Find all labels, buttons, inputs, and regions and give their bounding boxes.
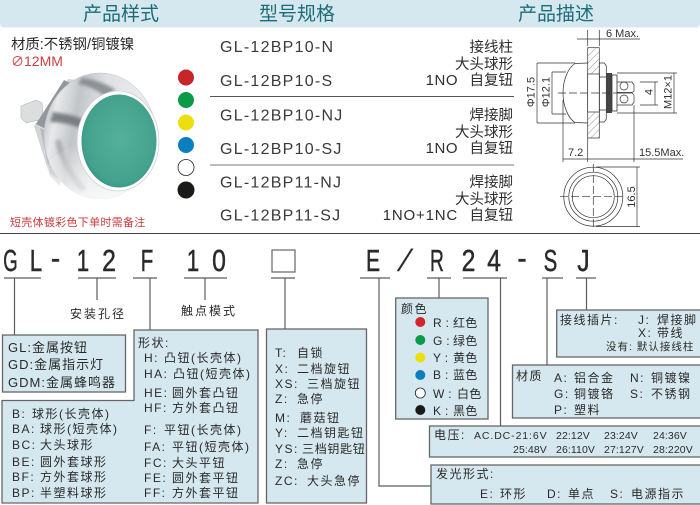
panel: voltage: AC.DC-21:6V: [474, 430, 548, 442]
panel: colour: 颜色: [401, 301, 428, 316]
part-number code: /: [394, 243, 416, 278]
label: contact mode: 触点模式: [181, 304, 237, 318]
panel: shape: 圆外套平钮: [172, 470, 240, 485]
part-number code: S: [544, 243, 557, 278]
diameter text: ∅12MM: [11, 53, 63, 69]
panel: switch function: 自锁: [297, 345, 324, 360]
panel: shape: FA:: [144, 440, 167, 454]
part-number code: -: [51, 241, 60, 276]
panel: lighting form: 单点: [568, 487, 595, 501]
panel: terminal: 没有: 默认接线柱: [606, 340, 694, 353]
description text: 1NO: [426, 140, 458, 157]
panel: shape: BA:: [12, 422, 36, 436]
model numbers: GL-12BP10-NJ: [220, 108, 344, 124]
panel: lighting form: D:: [547, 487, 562, 501]
panel: colour: 红色: [453, 315, 478, 330]
panel: shape: 圆外套球形: [40, 455, 108, 469]
panel: shape: F:: [144, 423, 158, 437]
panel: lighting form: 电源指示: [631, 486, 685, 501]
panel: shape: BF:: [12, 470, 35, 484]
panel: switch function: 蘑菇钮: [300, 410, 341, 425]
panel: shape: 大头球形: [40, 438, 94, 452]
panel: terminal: 焊接脚: [657, 312, 698, 327]
panel: switch function: M:: [275, 411, 291, 425]
panel: shape: 半塑料球形: [40, 485, 108, 500]
panel: lighting form: E:: [480, 487, 494, 501]
description text: 焊接脚: [470, 107, 513, 124]
model numbers: GL-12BP11-NJ: [220, 174, 342, 192]
description text: 大头球形: [455, 56, 513, 73]
panel: lighting form: 环形: [500, 487, 527, 501]
panel: shape: [2, 330, 258, 503]
panel: shape: 平钮(长壳体): [164, 422, 242, 437]
technical drawing: side view: Φ17.5: [526, 77, 538, 107]
panel: shape: FF:: [144, 486, 166, 500]
panel: material: P:: [554, 403, 568, 417]
panel: shape: HF:: [144, 401, 168, 415]
panel: terminal: 带线: [657, 326, 684, 340]
underlines and connectors: [4, 278, 596, 486]
part-number code: [3, 241, 590, 278]
heading: product style: 产品样式: [83, 3, 159, 25]
panel: lighting form: S:: [610, 487, 624, 501]
panel: shape: BP:: [12, 486, 36, 500]
panel: colour: G :: [433, 334, 450, 348]
panel: material: [512, 365, 700, 418]
model numbers: [220, 39, 344, 224]
panel: shape: BE:: [12, 455, 36, 469]
panel: shape: 方外套凸钮: [172, 400, 240, 415]
technical drawing: side view: [526, 28, 684, 162]
panel: colour: K :: [433, 404, 449, 418]
panel: colour: Y :: [433, 351, 448, 365]
panel: shape: 凸钮(长壳体): [164, 350, 242, 365]
panel: colour: R :: [433, 316, 449, 330]
panel: voltage: 28:220V: [653, 444, 693, 456]
panel: shape: B:: [12, 407, 26, 421]
technical drawing: side view: 15.5Max.: [639, 147, 684, 159]
heading: model spec: 型号规格: [259, 3, 335, 25]
model numbers: GL-12BP11-SJ: [220, 208, 341, 224]
panel: material: 铜镀铬: [574, 386, 615, 401]
panel: material: 不锈钢: [651, 387, 692, 401]
panel: shape: H:: [144, 351, 159, 365]
panel: material: 材质: [516, 369, 543, 383]
panel: switch function: [266, 329, 366, 503]
model numbers: GL-12BP10-N: [220, 39, 334, 56]
panel: colour: 黄色: [453, 351, 478, 365]
panel: switch function: Z:: [275, 457, 289, 471]
panel: shape: FC:: [144, 456, 168, 470]
panel: material: G:: [554, 387, 570, 401]
part-number code: 1: [77, 243, 89, 278]
panel: terminal: J:: [638, 313, 650, 327]
part-number code: 4: [487, 243, 501, 278]
panel: material: 铝合金: [574, 370, 615, 385]
panel: switch function: 二档钥匙钮: [297, 425, 365, 440]
panel: switch function: Y:: [275, 426, 289, 440]
panel: shape: HE:: [144, 386, 169, 400]
description text: 1NO: [426, 72, 458, 89]
part-number code: L: [30, 243, 42, 278]
panel: series: GD:金属指示灯: [8, 357, 104, 372]
panel: colour: 蓝色: [453, 368, 478, 382]
technical drawing: side view: Φ12.1: [540, 77, 552, 107]
panel: shape: BC:: [12, 438, 37, 452]
colour dots: [178, 70, 194, 198]
part-number code: E: [366, 243, 380, 278]
part-number code: 0: [212, 243, 226, 278]
panel: shape: 平钮(短壳体): [172, 439, 250, 454]
panel: switch function: Z:: [275, 392, 289, 406]
panel: voltage: 电压:: [434, 428, 466, 442]
technical drawing: front view: 16.5: [626, 186, 638, 208]
header band: [0, 0, 700, 28]
panel: shape: 方外套平钮: [172, 485, 240, 500]
panel: switch function: 急停: [297, 391, 324, 406]
description text: 自复钮: [470, 71, 513, 89]
panel: switch function: YS:: [275, 442, 299, 456]
panel: switch function: 三档钥匙钮: [302, 441, 366, 456]
part-number code: G: [3, 244, 18, 278]
description text: 自复钮: [470, 206, 513, 224]
part-number code: 1: [187, 243, 199, 278]
panel: voltage: 27:127V: [604, 444, 644, 456]
part-number code: 2: [102, 243, 116, 278]
panel: terminal: X:: [638, 326, 652, 340]
panel: colour: 白色: [457, 386, 482, 401]
panel: shape: 凸钮(短壳体): [173, 366, 252, 381]
heading: product description: 产品描述: [518, 3, 594, 25]
panel: material: 塑料: [574, 402, 601, 417]
panel: switch function: X:: [275, 362, 289, 376]
panel: series: GDM:金属蜂鸣器: [8, 375, 116, 390]
panel: shape: FE:: [144, 471, 167, 485]
panel: switch function: XS:: [275, 377, 299, 391]
panel: material: 铜镀镍: [651, 370, 692, 385]
technical drawing: side view: 6 Max.: [606, 28, 639, 40]
part-number code: -: [517, 241, 527, 276]
panel: colour: 绿色: [453, 333, 478, 348]
part-number code: J: [577, 243, 590, 278]
panel: series: [2, 335, 126, 392]
panel: shape: 球形(短壳体): [40, 422, 118, 436]
panel: colour: 黑色: [453, 404, 478, 418]
panel: shape: 形状:: [138, 336, 170, 350]
panel: colour: B :: [433, 368, 449, 382]
description text: 自复钮: [470, 139, 513, 157]
part-number code: R: [430, 245, 444, 278]
material text: 材质:不锈钢/铜镀镍: [11, 36, 134, 53]
panel: material: S:: [630, 387, 644, 401]
panel: shape: HA:: [144, 367, 169, 381]
panel: colour: W :: [433, 387, 452, 401]
panel: switch function: ZC:: [275, 474, 299, 488]
panel: series: GL:金属按钮: [8, 340, 88, 355]
panel: voltage: 26:110V: [556, 444, 595, 456]
panel: voltage: 24:36V: [653, 430, 687, 442]
panel: terminal: 接线插片:: [560, 312, 619, 327]
panel: shape: 圆外套凸钮: [172, 385, 240, 400]
panel: shape: 方外套球形: [40, 469, 108, 484]
description text: 1NO+1NC: [383, 207, 458, 224]
part-number code: F: [141, 243, 153, 278]
panel: voltage: 22:12V: [556, 430, 590, 442]
panel: material: A:: [554, 371, 568, 385]
footnote: 短壳体镀彩色下单时需备注: [10, 215, 146, 229]
description text: [383, 39, 513, 224]
panel: switch function: 二档旋钮: [297, 361, 351, 376]
panel: lighting form: 发光形式:: [436, 466, 495, 481]
panel: terminal: [557, 310, 700, 357]
panel: switch function: T:: [275, 346, 287, 360]
panel: shape: 大头平钮: [172, 455, 226, 470]
description text: 大头球形: [455, 124, 513, 141]
description text: 大头球形: [455, 191, 513, 208]
model numbers: GL-12BP10-S: [220, 73, 333, 90]
description text: 接线柱: [470, 39, 513, 56]
panel: voltage: 23:24V: [604, 430, 638, 442]
model numbers: GL-12BP10-SJ: [220, 141, 343, 158]
panel: colour: [396, 298, 488, 419]
technical drawing: front view: [560, 164, 640, 230]
panel: voltage: [430, 426, 700, 457]
product photo: metal push button: [21, 73, 159, 201]
label: mounting hole: 安装孔径: [70, 306, 126, 321]
panel: switch function: 急停: [297, 456, 324, 471]
part-number code: 2: [462, 243, 475, 278]
technical drawing: side view: 7.2: [568, 147, 583, 159]
technical drawing: side view: 4: [644, 89, 656, 95]
panel: voltage: 25:48V: [513, 444, 547, 456]
panel: switch function: 大头急停: [307, 473, 361, 488]
panel: shape: 球形(长壳体): [32, 407, 110, 421]
technical drawing: side view: M12×1: [662, 75, 674, 109]
panel: material: N:: [630, 371, 645, 385]
panel: lighting form: [431, 465, 700, 504]
panel: switch function: 三档旋钮: [307, 376, 361, 391]
description text: 焊接脚: [470, 174, 513, 191]
